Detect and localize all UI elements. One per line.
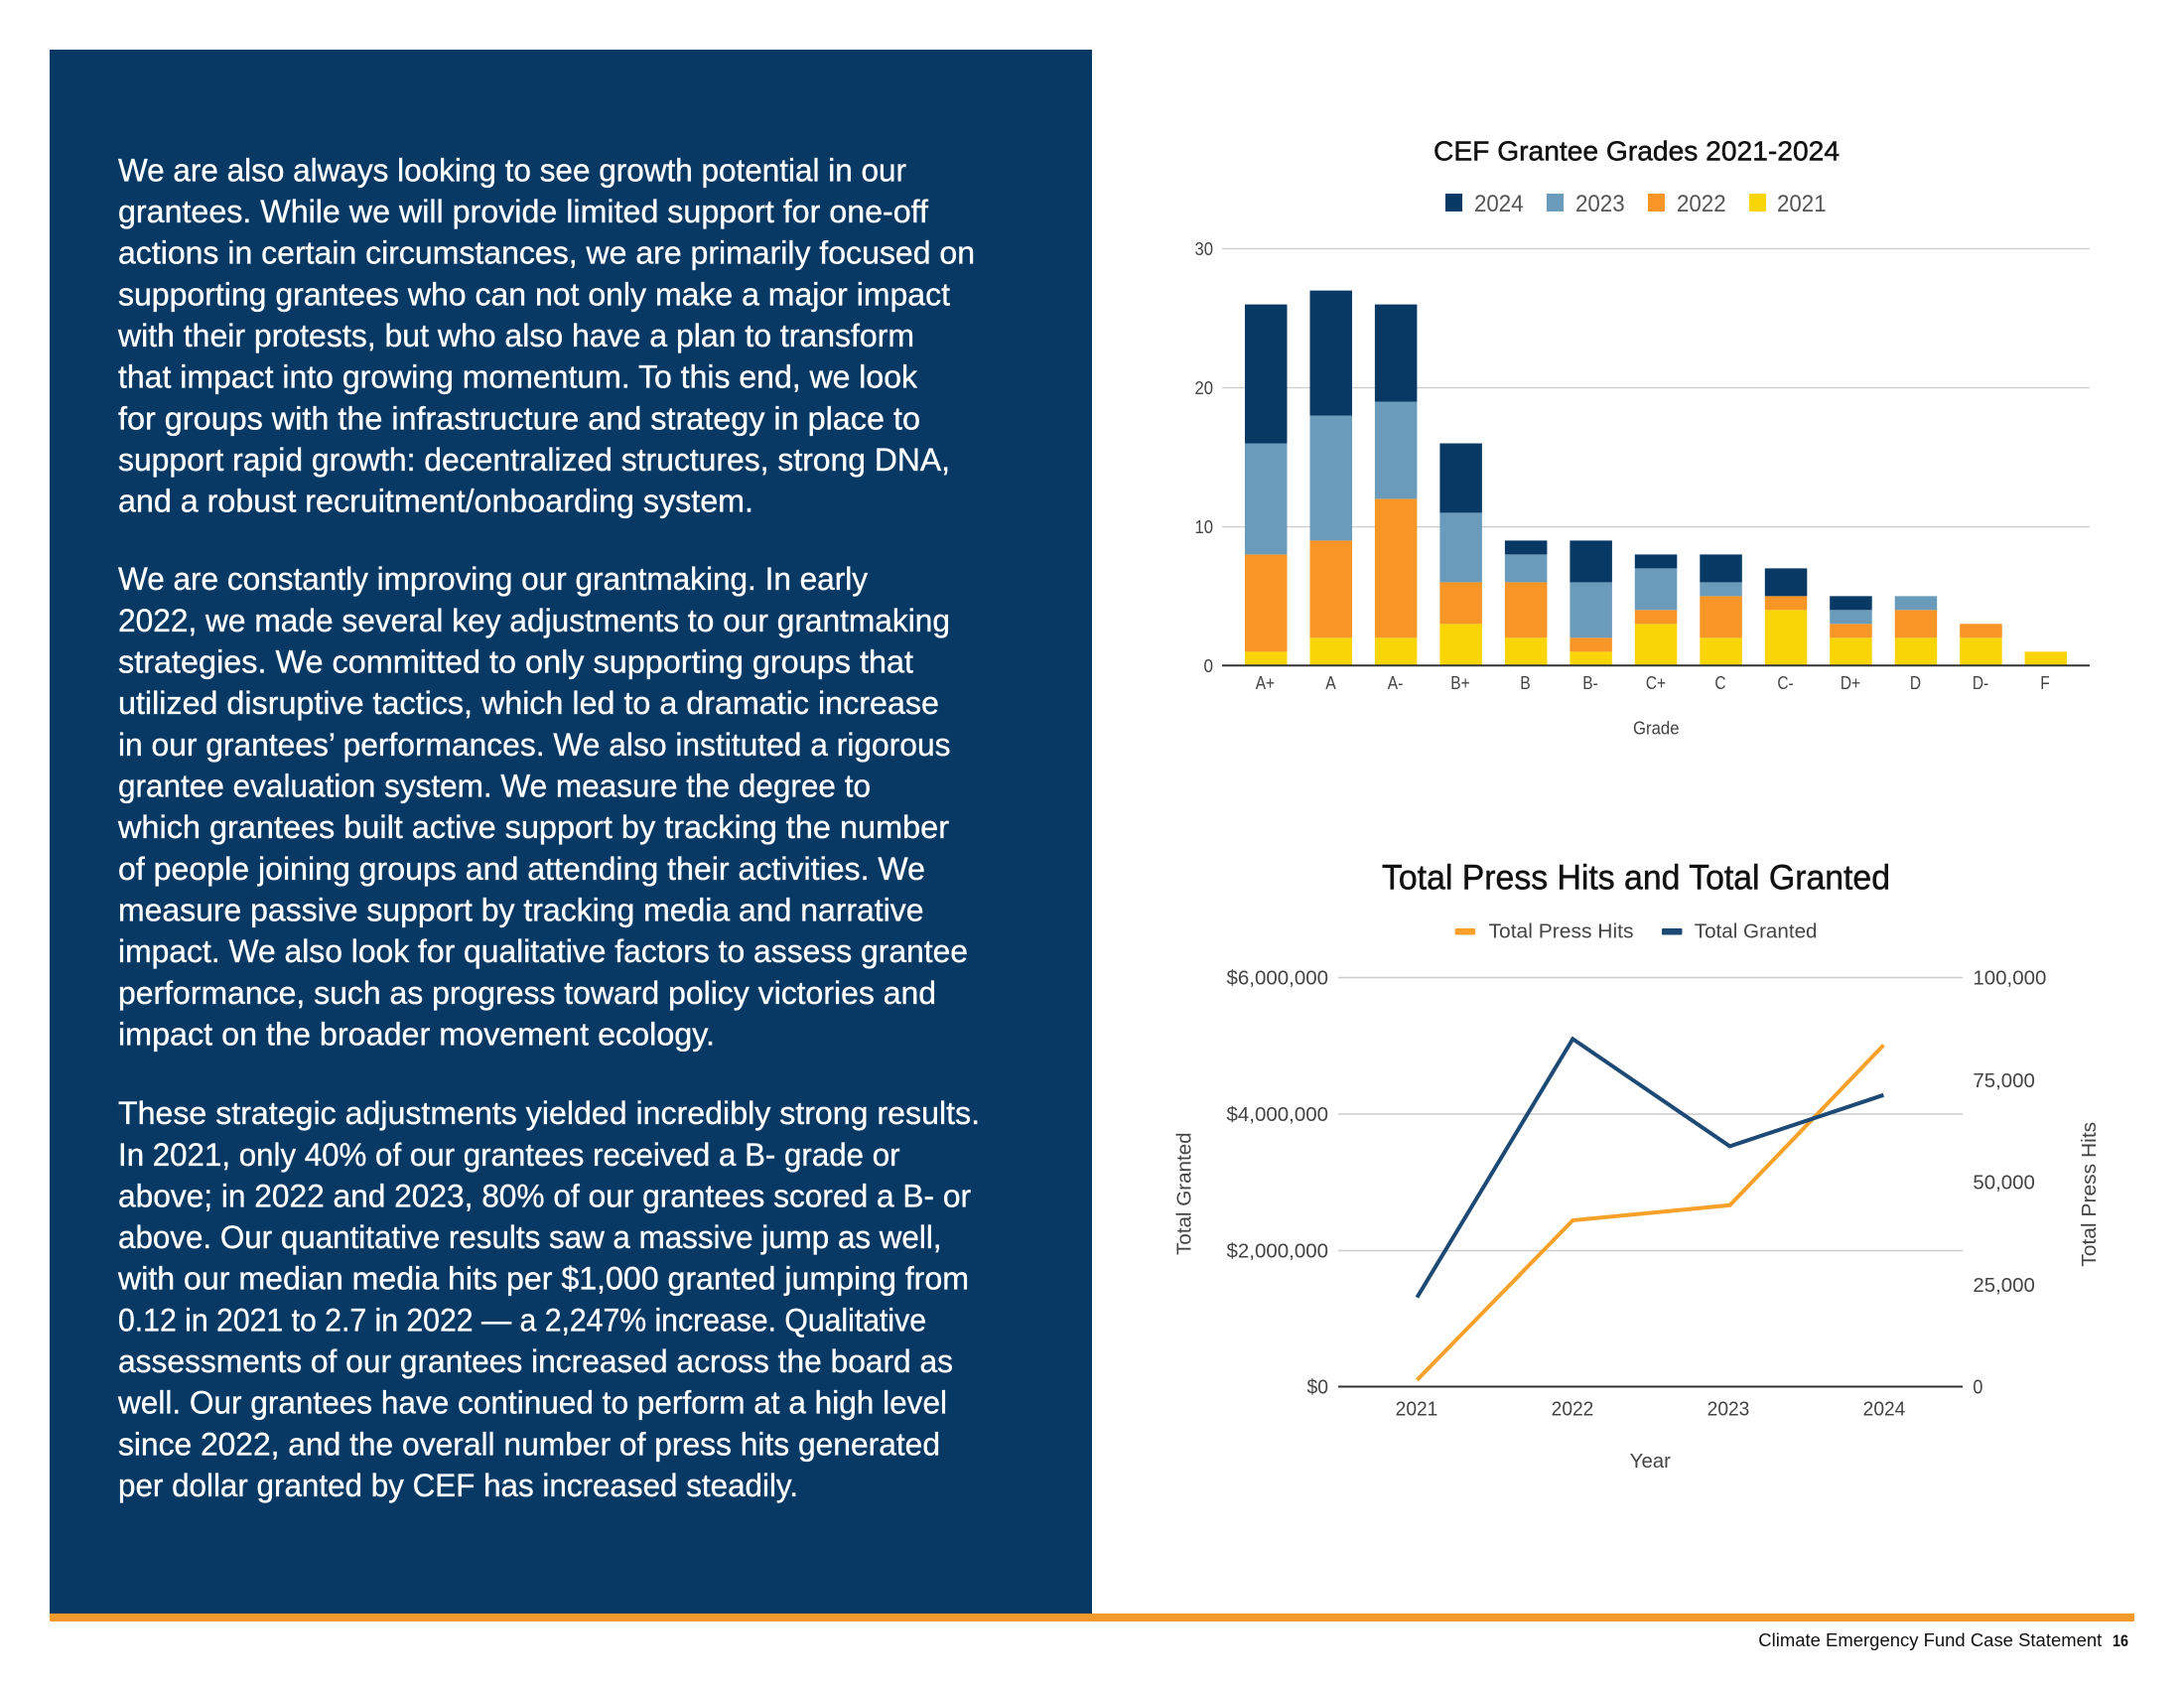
y axis labels: 10 xyxy=(1195,517,1213,537)
bar: C+ xyxy=(1635,554,1677,665)
text block: strategic results paragraph: above; in 2022 and 2023, 80% of our grantees scored a B- or xyxy=(118,1178,971,1213)
x axis labels: D xyxy=(1910,673,1921,693)
x axis labels: C xyxy=(1714,673,1726,693)
text block: strategic results paragraph: well. Our grantees have continued to perform at a high level xyxy=(117,1385,947,1421)
text block: grantmaking improvements paragraph: utilized disruptive tactics, which led to a dramatic increase xyxy=(118,685,939,721)
x axis labels: F xyxy=(2040,673,2050,693)
x axis labels: B xyxy=(1520,673,1531,693)
x axis labels xyxy=(1396,1398,1905,1420)
text block: strategic results paragraph: above. Our quantitative results saw a massive jump as well, xyxy=(118,1219,941,1255)
text block: growth potential paragraph: for groups with the infrastructure and strategy in place to xyxy=(118,400,920,436)
left axis labels: $0 xyxy=(1306,1376,1328,1398)
y axis labels: 30 xyxy=(1195,239,1213,259)
text block: grantmaking improvements paragraph: of people joining groups and attending their activities. We xyxy=(118,851,925,887)
bar: D- xyxy=(1960,624,2002,665)
legend xyxy=(1445,191,1827,217)
bar: B xyxy=(1505,540,1547,665)
panel: narrative text background xyxy=(50,50,1092,1614)
x axis labels: A+ xyxy=(1256,673,1275,693)
text block: strategic results paragraph: per dollar granted by CEF has increased steadily. xyxy=(118,1468,798,1503)
text block: growth potential paragraph: actions in certain circumstances, we are primarily focused on xyxy=(118,235,975,271)
chart title: Total Press Hits and Total Granted xyxy=(1382,858,1890,898)
bar: D+ xyxy=(1830,596,1872,665)
text block: growth potential paragraph: that impact into growing momentum. To this end, we look xyxy=(118,359,918,395)
x axis labels: D+ xyxy=(1841,673,1860,693)
x axis labels: A- xyxy=(1388,673,1403,693)
left axis labels xyxy=(1227,967,1328,1398)
text block: grantmaking improvements paragraph: We are constantly improving our grantmaking. In early xyxy=(118,561,868,597)
legend: 2024 xyxy=(1474,191,1524,217)
right axis labels: 0 xyxy=(1973,1376,1982,1398)
x axis labels: D- xyxy=(1973,673,1988,693)
x axis labels: A xyxy=(1325,673,1336,693)
x axis labels xyxy=(1256,673,2050,693)
right axis labels: 100,000 xyxy=(1973,967,2046,989)
text block: strategic results paragraph xyxy=(117,1095,980,1503)
left axis labels: $2,000,000 xyxy=(1227,1241,1328,1263)
x axis labels: 2022 xyxy=(1552,1398,1593,1420)
chart: CEF Grantee Grades stacked bar chart xyxy=(1195,136,2090,739)
x axis title: Grade xyxy=(1633,719,1680,739)
y axis labels xyxy=(1195,239,1213,676)
legend: 2022 xyxy=(1677,191,1726,217)
text block: growth potential paragraph: grantees. While we will provide limited support for one-off xyxy=(118,194,928,229)
chart: Total Press Hits and Total Granted line chart xyxy=(1174,858,2101,1473)
legend: 2023 xyxy=(1575,191,1625,217)
text block: strategic results paragraph: These strategic adjustments yielded incredibly strong results. xyxy=(118,1095,980,1131)
text block: strategic results paragraph: 0.12 in 2021 to 2.7 in 2022 — a 2,247% increase. Qualitative xyxy=(118,1302,926,1337)
text block: strategic results paragraph: In 2021, only 40% of our grantees received a B- grade or xyxy=(118,1137,900,1173)
x axis labels: 2023 xyxy=(1707,1398,1749,1420)
legend xyxy=(1455,921,1817,943)
footer rule xyxy=(50,1614,2134,1621)
text block: grantmaking improvements paragraph: impact. We also look for qualitative factors to assess grantee xyxy=(118,933,968,969)
x axis labels: B- xyxy=(1582,673,1598,693)
legend: Total Granted xyxy=(1695,921,1817,943)
y axis labels: 20 xyxy=(1195,378,1213,398)
bar: A xyxy=(1310,291,1352,665)
x axis labels: 2021 xyxy=(1396,1398,1437,1420)
x axis labels: C- xyxy=(1777,673,1794,693)
left axis labels: $6,000,000 xyxy=(1227,967,1328,989)
footer: document title and page number: 16 xyxy=(2113,1631,2128,1650)
text block: strategic results paragraph: assessments of our grantees increased across the board as xyxy=(118,1343,953,1379)
text block: growth potential paragraph: and a robust recruitment/onboarding system. xyxy=(118,484,753,519)
y axis labels: 0 xyxy=(1203,656,1213,676)
right axis labels xyxy=(1973,967,2046,1398)
right axis labels: 25,000 xyxy=(1973,1275,2035,1297)
chart title: CEF Grantee Grades 2021-2024 xyxy=(1433,136,1840,167)
bar: F xyxy=(2025,651,2067,665)
bar: D xyxy=(1895,596,1937,665)
text block: growth potential paragraph: support rapid growth: decentralized structures, strong DNA, xyxy=(118,442,950,478)
text block: grantmaking improvements paragraph: grantee evaluation system. We measure the degree to xyxy=(118,769,871,804)
right axis title: Total Press Hits xyxy=(2079,1122,2101,1267)
text block: grantmaking improvements paragraph: impact on the broader movement ecology. xyxy=(118,1017,715,1053)
bar: A- xyxy=(1375,305,1417,665)
x axis labels: 2024 xyxy=(1863,1398,1905,1420)
footer: document title and page number: Climate Emergency Fund Case Statement xyxy=(1758,1630,2102,1650)
text block: growth potential paragraph: We are also always looking to see growth potential in our xyxy=(118,152,906,188)
text block: grantmaking improvements paragraph xyxy=(117,561,968,1053)
x axis labels: B+ xyxy=(1450,673,1470,693)
x axis title: Year xyxy=(1630,1451,1671,1473)
line: Total Granted xyxy=(1417,1039,1883,1298)
text block: grantmaking improvements paragraph: which grantees built active support by tracking the number xyxy=(117,809,949,845)
right axis labels: 75,000 xyxy=(1973,1070,2035,1092)
bar: C- xyxy=(1765,568,1807,665)
text block: grantmaking improvements paragraph: in our grantees’ performances. We also instituted a rigorous xyxy=(118,727,951,763)
legend: Total Press Hits xyxy=(1489,921,1634,943)
text block: grantmaking improvements paragraph: performance, such as progress toward policy victories and xyxy=(118,975,936,1011)
text block: grantmaking improvements paragraph: strategies. We committed to only supporting groups that xyxy=(118,643,913,679)
text block: growth potential paragraph: supporting grantees who can not only make a major impact xyxy=(118,276,950,312)
text block: strategic results paragraph: with our median media hits per $1,000 granted jumping from xyxy=(117,1261,969,1297)
bar: C xyxy=(1700,554,1742,665)
text block: growth potential paragraph: with their protests, but who also have a plan to transform xyxy=(117,318,914,353)
line: Total Press Hits xyxy=(1417,1045,1883,1380)
text block: grantmaking improvements paragraph: measure passive support by tracking media and narrative xyxy=(118,892,923,927)
bar: A+ xyxy=(1245,305,1287,665)
legend: 2021 xyxy=(1777,191,1827,217)
left axis title: Total Granted xyxy=(1174,1132,1196,1255)
text block: grantmaking improvements paragraph: 2022, we made several key adjustments to our grantmaking xyxy=(118,603,950,638)
bar: B+ xyxy=(1439,443,1482,665)
bar: B- xyxy=(1570,540,1612,665)
right axis labels: 50,000 xyxy=(1973,1172,2035,1194)
text block: strategic results paragraph: since 2022, and the overall number of press hits generated xyxy=(118,1426,940,1462)
left axis labels: $4,000,000 xyxy=(1227,1104,1328,1126)
x axis labels: C+ xyxy=(1646,673,1666,693)
text block: growth potential paragraph xyxy=(117,152,975,519)
